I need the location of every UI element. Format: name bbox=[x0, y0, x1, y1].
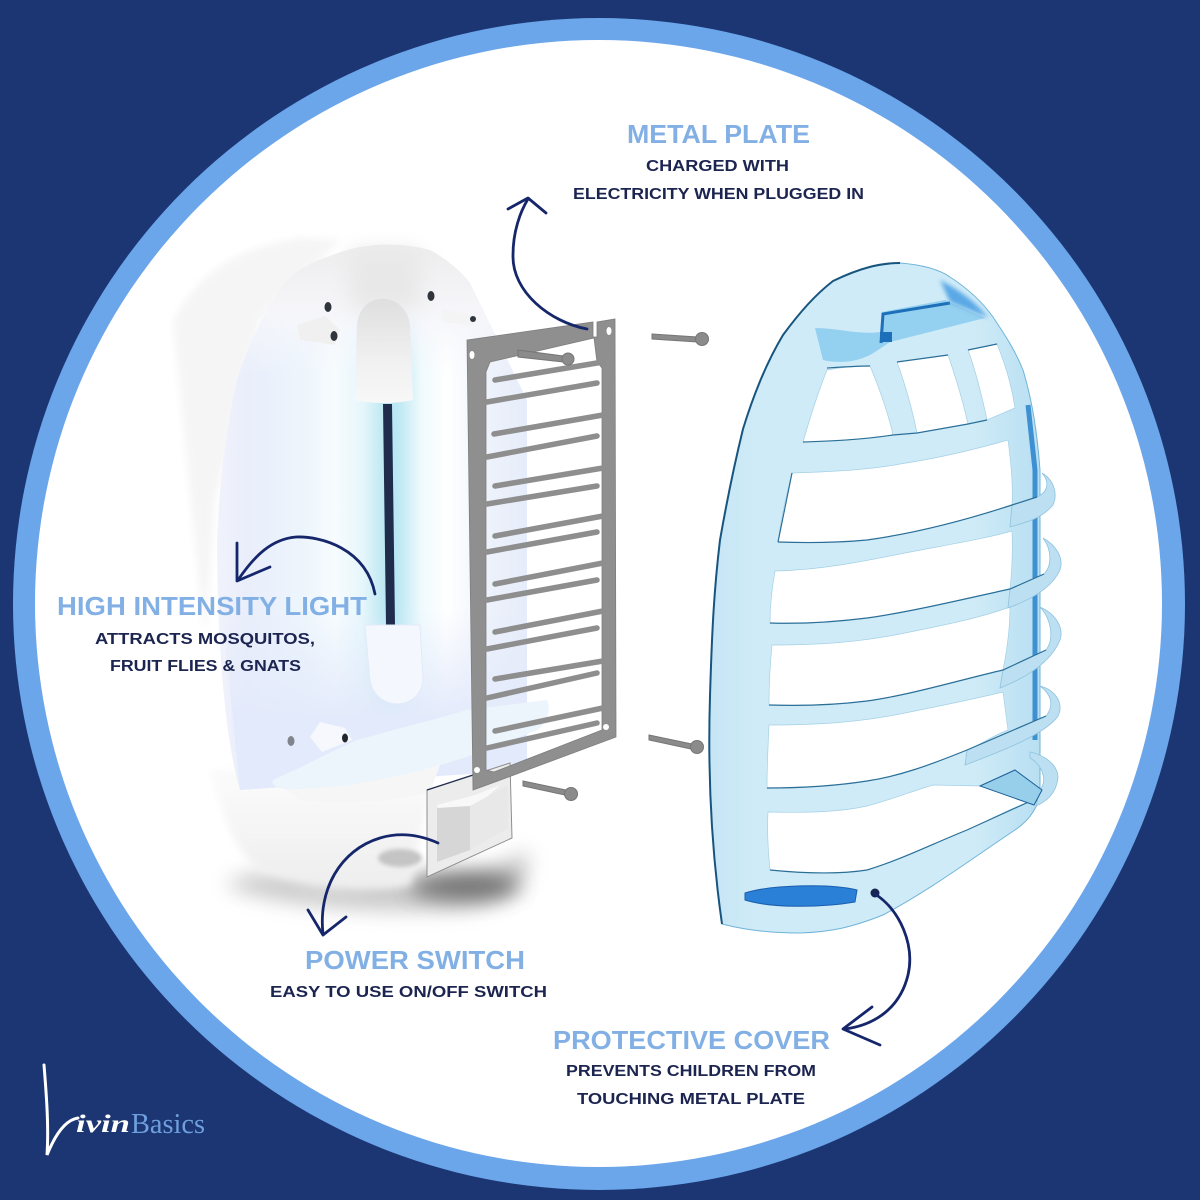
screw 1 bbox=[652, 332, 708, 346]
mounting posts bbox=[288, 291, 476, 752]
arrow: protective cover bbox=[843, 894, 910, 1045]
lower lamp housing bbox=[365, 625, 423, 704]
label: high intensity light: FRUIT FLIES & GNATS bbox=[110, 658, 301, 675]
label: high intensity light bbox=[57, 591, 367, 675]
metal plate bbox=[467, 319, 616, 790]
label: power switch bbox=[270, 945, 547, 1001]
label: high intensity light: HIGH INTENSITY LIGHT bbox=[57, 591, 367, 621]
arrow: metal plate bbox=[508, 198, 587, 329]
logo: Basics bbox=[131, 1109, 205, 1140]
cover shell bbox=[709, 263, 1040, 933]
ring bands bbox=[965, 473, 1061, 806]
body lower tint bbox=[222, 610, 527, 790]
body shell bbox=[217, 245, 527, 790]
plug stem bbox=[378, 849, 422, 867]
protective cover bbox=[709, 263, 1061, 933]
label: protective cover: PROTECTIVE COVER bbox=[553, 1025, 830, 1055]
plate tines bbox=[487, 362, 603, 748]
label: protective cover: PREVENTS CHILDREN FROM bbox=[566, 1063, 816, 1080]
lower right tab bbox=[980, 770, 1042, 805]
arrow: power switch bbox=[308, 835, 438, 935]
plate holes bbox=[470, 327, 612, 773]
plate frame bbox=[467, 319, 616, 790]
switch block bbox=[437, 785, 500, 816]
body top shade bbox=[237, 245, 527, 400]
top clip detail bbox=[815, 280, 988, 362]
screw 2 bbox=[518, 350, 574, 365]
label: protective cover bbox=[553, 1025, 830, 1108]
product body: base unit bbox=[173, 238, 549, 910]
cover windows bbox=[767, 344, 1037, 873]
logo bbox=[44, 1065, 205, 1155]
shelf ridges bbox=[285, 765, 440, 803]
screws bbox=[518, 332, 708, 800]
screw 4 bbox=[523, 781, 578, 800]
label: metal plate bbox=[573, 119, 864, 203]
switch plate bbox=[427, 763, 512, 877]
cover dark outer edge bbox=[709, 263, 900, 924]
lower base bbox=[210, 770, 430, 887]
label: protective cover: TOUCHING METAL PLATE bbox=[577, 1091, 805, 1108]
upper lamp housing bbox=[350, 250, 420, 403]
logo: ivin bbox=[76, 1111, 130, 1138]
right edge blue bbox=[1028, 405, 1035, 740]
bottom blue tab bbox=[745, 886, 857, 906]
band top edges bbox=[767, 344, 1046, 873]
screw 3 bbox=[649, 735, 704, 754]
floor shadow bbox=[225, 850, 528, 910]
tube light bbox=[383, 404, 395, 625]
soft shadow behind body bbox=[173, 238, 340, 640]
power switch housing bbox=[378, 763, 512, 877]
label: high intensity light: ATTRACTS MOSQUITOS, bbox=[95, 631, 315, 648]
label: power switch: POWER SWITCH bbox=[305, 945, 525, 975]
label: power switch: EASY TO USE ON/OFF SWITCH bbox=[270, 984, 547, 1001]
arrow: high intensity light bbox=[237, 537, 375, 594]
base shelf bbox=[273, 700, 549, 789]
label: metal plate: CHARGED WITH bbox=[646, 158, 789, 175]
label: metal plate: METAL PLATE bbox=[627, 119, 810, 149]
label: metal plate: ELECTRICITY WHEN PLUGGED IN bbox=[573, 186, 864, 203]
cover end cap bbox=[870, 888, 880, 898]
